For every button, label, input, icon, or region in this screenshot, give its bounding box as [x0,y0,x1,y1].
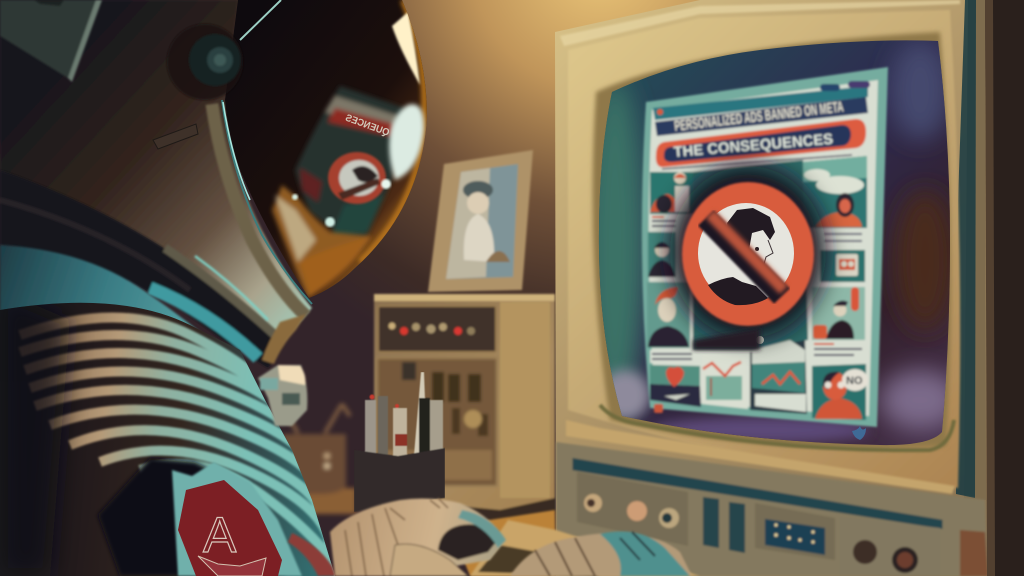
dark patch surround [98,458,285,576]
left knob panel [577,472,688,546]
glass jar and desk shelf [282,404,356,514]
bottom chart [702,354,748,409]
neck collar ring [0,170,306,368]
keyboard [470,520,700,576]
right dark edge [992,0,1024,576]
reflected title: QUENCES [343,113,391,139]
orange edge glow [360,0,425,262]
cabinet indicator panel [378,306,496,352]
screen [585,30,960,450]
bottom panel question [650,350,701,407]
no speech bubble text: NO [846,375,863,387]
teal collar band [150,288,258,358]
side cabinet [374,294,555,526]
right side casing [964,0,986,500]
person figure [708,208,775,305]
suit arm with ribs [0,290,340,576]
dark palm gap [438,524,501,560]
sign interior [698,203,794,303]
pens [365,372,443,460]
helmet top-left plate [0,0,102,82]
pen cup [354,448,445,512]
sign ring [682,182,814,326]
right knob panel [840,517,940,576]
monitor casing [555,0,988,576]
helmet camera knob [167,24,243,100]
prohibition halo [670,166,826,338]
nose and face outline [764,240,773,264]
left panel 2 [648,232,676,277]
left panel 1 [650,172,693,214]
caption strip [662,155,852,169]
small reflect icon [756,336,764,344]
pens and cup [354,372,445,512]
glove seams [345,498,448,576]
lower small dark wedge [693,328,760,350]
suit shoulder [0,245,222,350]
right cassette panel [820,250,865,282]
right text block 2 [813,342,863,358]
lower bezel lip [566,420,955,494]
left panel 3 [647,282,690,348]
reflected prohibition sign [328,152,386,204]
monitor control deck [556,420,988,576]
right glove [510,531,692,576]
prohibition sign [682,182,814,344]
subtitle pill [656,119,866,167]
bird icon [852,426,866,440]
cabinet control panel [377,358,497,486]
left text 1 [651,214,676,228]
patch letter: A [203,507,237,563]
title banner: PERSONALIZED ADS BANNED ON META [674,99,844,135]
white highlights [292,12,424,227]
led panel [755,503,835,560]
helmet screw plate [153,124,198,149]
right panel clouds and woman [803,156,867,228]
monitor bezel [568,10,960,488]
sleeve red stripe [288,533,336,576]
dark teal inset [956,0,976,498]
picture frame [428,150,533,292]
right person panel [812,287,865,340]
sign slash [706,218,782,296]
suit valve connector [258,365,307,426]
top browser bar [653,81,870,120]
bottom chart 2 [750,340,807,414]
visor hinge strut [240,0,281,40]
top casing lip [560,0,960,46]
subtitle pill: THE CONSEQUENCES [673,131,834,161]
torso [708,277,768,305]
helmet rim [212,0,312,316]
bronze band [165,248,275,335]
reflected desk gold [272,185,372,298]
red footer icon [654,404,663,413]
shoulder patch [172,462,302,576]
hair [727,208,775,260]
bottom panel person with no bubble [812,364,868,420]
left glove [330,498,506,576]
poster sheet [642,67,888,427]
title banner [655,97,868,136]
right text block [824,232,863,244]
visor [220,0,440,300]
figure in photo [463,181,510,262]
infographic poster on screen [642,67,888,427]
reflected infographic [295,86,405,250]
central background [693,160,808,350]
lower finger [390,544,468,576]
screen lower bezel edge [600,405,954,450]
desk surface [450,510,556,576]
teal fingertip [458,510,506,548]
screen glows [585,40,960,444]
bright teal line [195,256,268,320]
astronaut helmet shell [0,0,312,345]
vents [703,497,745,553]
bezel inner shading [593,32,951,448]
